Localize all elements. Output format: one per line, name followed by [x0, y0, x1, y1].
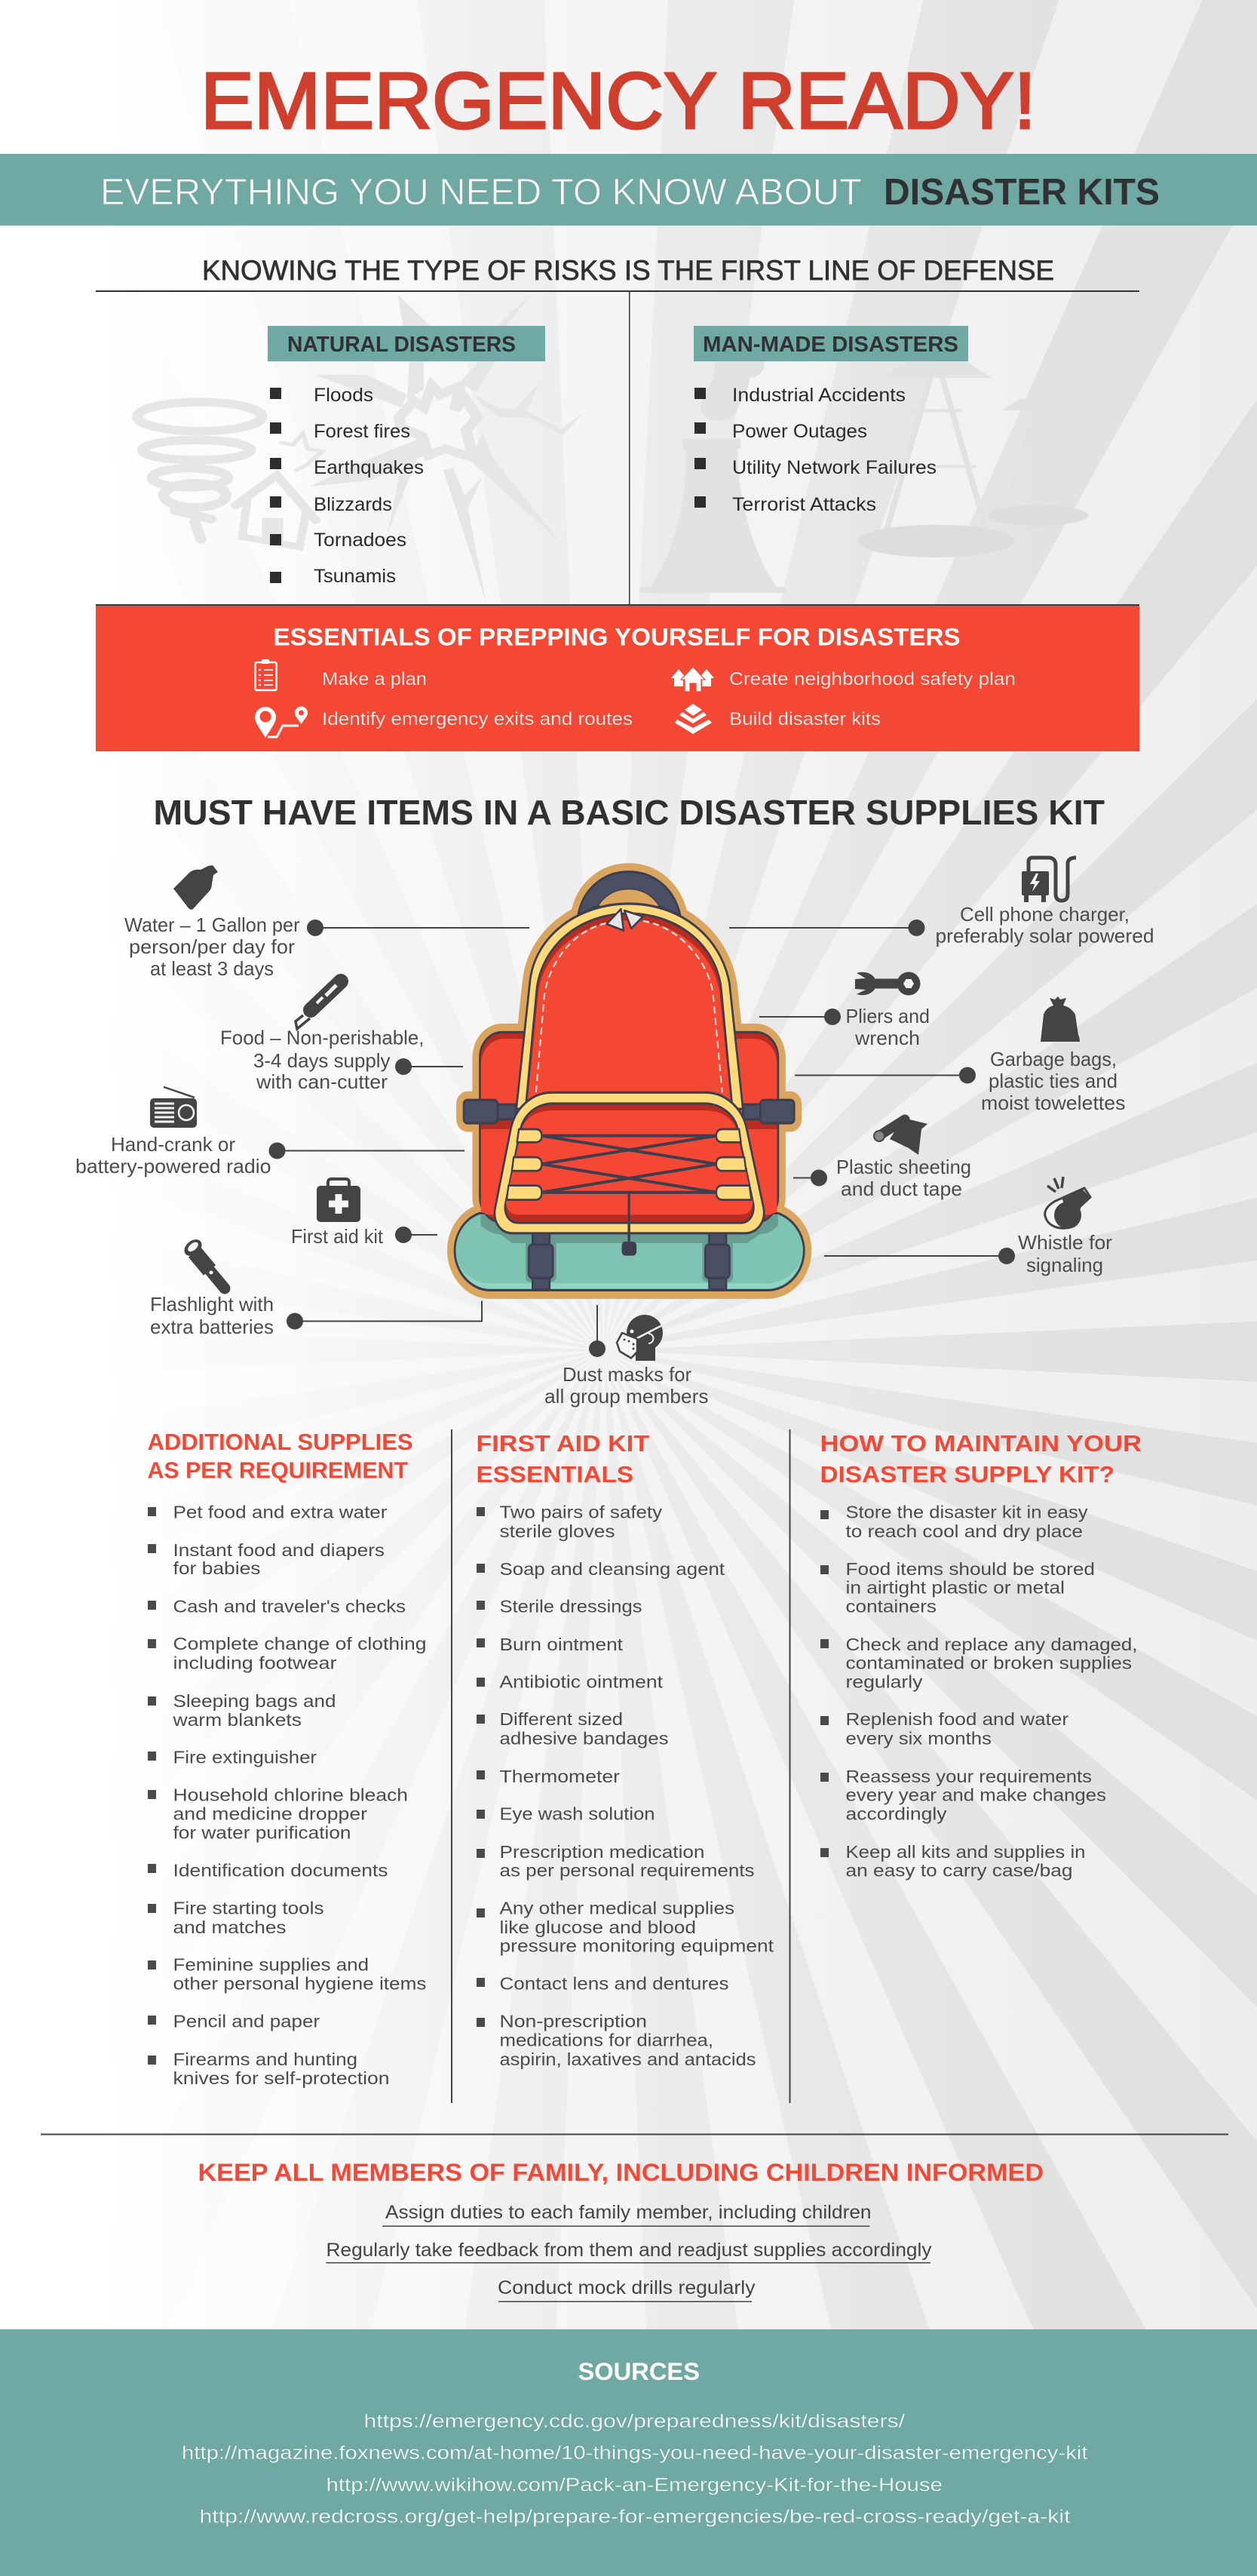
label: whistle: signaling [1026, 1254, 1103, 1276]
subtitle text: EVERYTHING YOU NEED TO KNOW ABOUT [100, 172, 862, 213]
label: charger [935, 903, 1154, 947]
panel: first aid essentials [477, 1430, 774, 2069]
ghost house [236, 434, 323, 547]
label: charger: Cell phone charger, [960, 903, 1130, 926]
source links: http://magazine.foxnews.com/at-home/10-things-you-need-have-your-disaster-emergency-kit [182, 2442, 1088, 2464]
callout: charger [729, 858, 1154, 947]
side straps [464, 1100, 794, 1123]
icon: clipboard [255, 659, 276, 690]
list: man-made disasters: Utility Network Failures [732, 457, 937, 478]
list: man-made disasters: Industrial Accidents [732, 385, 906, 406]
text: neighborhood plan: Create neighborhood safety plan [729, 669, 1016, 689]
list: first aid: sterile gloves [499, 1521, 615, 1541]
icon: charger [1022, 858, 1076, 902]
panel: keep family informed [198, 2159, 1044, 2302]
label: water: at least 3 days [150, 957, 274, 980]
connector [729, 920, 924, 936]
heading: family: KEEP ALL MEMBERS OF FAMILY, INCLUDING CHILDREN INFORMED [198, 2159, 1044, 2186]
connector [795, 1067, 976, 1083]
list: additional supplies: knives for self-protection [173, 2068, 389, 2088]
text: mock drills: Conduct mock drills regularly [498, 2277, 756, 2298]
connector [395, 1058, 463, 1075]
heading: first aid: FIRST AID KIT [477, 1430, 649, 1457]
heading: sources: SOURCES [578, 2358, 700, 2385]
ghost illustration: natural disasters [138, 294, 584, 602]
connector [268, 1142, 464, 1159]
label: flashlight [150, 1293, 274, 1338]
list: additional supplies [148, 1503, 427, 2088]
label: radio: battery-powered radio [75, 1155, 271, 1177]
label: radio [75, 1133, 271, 1177]
icon: plastic roll [874, 1118, 927, 1155]
connector [793, 1169, 827, 1186]
callout: garbage bags [795, 996, 1125, 1114]
list: additional supplies: for water purification [173, 1822, 351, 1842]
heading: additional supplies [148, 1429, 413, 1483]
label: water: person/per day for [129, 935, 295, 958]
list: first aid: pressure monitoring equipment [499, 1936, 774, 1955]
label: food: 3-4 days supply [253, 1049, 391, 1072]
label: water [124, 913, 300, 980]
list: first aid: Thermometer [499, 1767, 620, 1786]
connector [307, 920, 529, 936]
callout: flashlight [150, 1236, 482, 1338]
list: additional supplies: other personal hygiene items [173, 1973, 427, 1993]
list: additional supplies: Complete change of clothing [173, 1634, 427, 1653]
list: maintain: every six months [846, 1729, 992, 1749]
icon: wrench [855, 972, 920, 996]
label: dust masks: Dust masks for [563, 1363, 691, 1386]
connector [395, 1227, 437, 1243]
main compartment [517, 904, 743, 1109]
heading: first aid [477, 1430, 649, 1488]
text: assign duties: Assign duties to each family member, including children [385, 2202, 872, 2223]
list: maintain: containers [846, 1596, 937, 1616]
list: maintain: contaminated or broken supplies [846, 1653, 1132, 1673]
panel: essentials of prepping [96, 604, 1139, 751]
natural disasters heading: NATURAL DISASTERS [287, 333, 516, 357]
label: garbage bags: moist towelettes [981, 1091, 1125, 1114]
title: EMERGENCY READY! [201, 57, 1036, 146]
icon: layered kit [675, 704, 712, 734]
heading: maintain: DISASTER SUPPLY KIT? [820, 1461, 1114, 1488]
ghost tornado [138, 402, 262, 539]
label: dust masks [544, 1363, 709, 1408]
text: take feedback: Regularly take feedback from them and readjust supplies accordingly [326, 2240, 932, 2261]
list: additional supplies: warm blankets [172, 1710, 302, 1730]
list: first aid: Soap and cleansing agent [499, 1559, 725, 1579]
ghost cooling tower [640, 439, 786, 593]
label: flashlight: extra batteries [150, 1316, 274, 1338]
panel: sources [0, 2329, 1257, 2576]
list: maintain: regularly [846, 1672, 923, 1691]
label: whistle: Whistle for [1018, 1231, 1112, 1254]
list: natural disasters: Blizzards [314, 494, 392, 515]
callout: whistle [824, 1177, 1112, 1276]
ghost crack [309, 294, 584, 602]
list: first aid: aspirin, laxatives and antacids [499, 2049, 756, 2069]
heading: must have items: MUST HAVE ITEMS IN A BASIC DISASTER SUPPLIES KIT [154, 793, 1105, 832]
list: first aid: Burn ointment [499, 1635, 624, 1654]
list: additional supplies: Pet food and extra water [173, 1503, 388, 1522]
list: additional supplies: Instant food and diapers [173, 1540, 385, 1560]
list: maintain: Reassess your requirements [846, 1767, 1092, 1786]
list: man-made disasters [694, 385, 937, 515]
list: additional supplies: Fire extinguisher [173, 1747, 317, 1767]
source links: http://www.redcross.org/get-help/prepare-for-emergencies/be-red-cross-ready/get-a-kit [199, 2506, 1071, 2527]
list: first aid: Eye wash solution [499, 1804, 655, 1824]
label: food: Food – Non-perishable, [220, 1026, 424, 1049]
text: exits and routes: Identify emergency exits and routes [322, 709, 633, 729]
list: first aid: medications for diarrhea, [499, 2031, 713, 2050]
label: pliers: wrench [854, 1027, 920, 1049]
bottom straps [529, 1231, 729, 1290]
list: natural disasters: Earthquakes [314, 457, 424, 478]
heading: maintain: HOW TO MAINTAIN YOUR [820, 1430, 1142, 1457]
man-made disasters heading: MAN-MADE DISASTERS [703, 333, 958, 357]
list: maintain: Keep all kits and supplies in [846, 1842, 1086, 1862]
list: first aid: Prescription medication [499, 1842, 704, 1862]
list: natural disasters: Floods [314, 385, 373, 406]
front pocket [495, 1092, 764, 1256]
list: maintain: Replenish food and water [846, 1709, 1068, 1729]
list: maintain: every year and make changes [846, 1785, 1106, 1804]
list: additional supplies: Identification documents [173, 1860, 388, 1880]
label: plastic sheeting [836, 1156, 971, 1200]
label: food: with can-cutter [256, 1070, 388, 1093]
list: additional supplies: Pencil and paper [173, 2011, 320, 2031]
label: water: Water – 1 Gallon per [124, 913, 300, 936]
icon: houses [671, 667, 714, 692]
label: plastic sheeting: and duct tape [841, 1177, 962, 1200]
callout: plastic sheeting [793, 1118, 971, 1200]
list: first aid [477, 1503, 774, 2069]
ghost illustration: man-made disasters [640, 361, 1088, 593]
icon: first aid case [317, 1179, 360, 1222]
icon: whistle [1045, 1177, 1090, 1229]
list: maintain: to reach cool and dry place [846, 1521, 1083, 1541]
list: additional supplies: including footwear [173, 1653, 337, 1673]
label: pliers [846, 1005, 930, 1049]
label: first aid: First aid kit [291, 1225, 384, 1248]
list: man-made disasters: Power Outages [732, 421, 867, 442]
list: first aid: adhesive bandages [499, 1729, 668, 1749]
icon: water jug [173, 865, 218, 910]
list: first aid: Non-prescription [499, 2011, 647, 2031]
label: pliers: Pliers and [846, 1005, 930, 1027]
source links: http://www.wikihow.com/Pack-an-Emergency-Kit-for-the-House [326, 2474, 943, 2495]
list: man-made disasters: Terrorist Attacks [732, 494, 876, 515]
list: maintain: Food items should be stored [846, 1559, 1095, 1579]
ghost smoke [701, 361, 765, 421]
label: plastic sheeting: Plastic sheeting [836, 1156, 971, 1178]
callout: water [124, 865, 529, 980]
subtitle band [0, 154, 1257, 226]
source links: https://emergency.cdc.gov/preparedness/kit/disasters/ [363, 2411, 905, 2432]
list: first aid: Antibiotic ointment [499, 1672, 664, 1691]
icon: can cutter [296, 981, 341, 1029]
icon: garbage bag [1041, 996, 1080, 1042]
ghost pylon small [989, 399, 1088, 526]
label: radio: Hand-crank or [111, 1133, 235, 1156]
list: first aid: Sterile dressings [499, 1596, 642, 1616]
source links [182, 2411, 1088, 2527]
heading: risks: KNOWING THE TYPE OF RISKS IS THE FIRST LINE OF DEFENSE [202, 255, 1054, 286]
callout: pliers and wrench [759, 972, 930, 1049]
callout: first aid [291, 1179, 437, 1248]
connector [589, 1305, 606, 1357]
list: maintain: Check and replace any damaged, [846, 1635, 1137, 1654]
list: natural disasters: Forest fires [314, 421, 410, 442]
heading: maintain [820, 1430, 1142, 1488]
text: make a plan: Make a plan [322, 669, 427, 689]
panel: natural disasters [268, 326, 545, 587]
panel: additional supplies [148, 1429, 427, 2088]
list: additional supplies: Cash and traveler's checks [173, 1596, 406, 1616]
list: natural disasters: Tornadoes [314, 530, 406, 551]
icon: flashlight [181, 1236, 225, 1288]
list: additional supplies: and medicine dropper [173, 1804, 367, 1824]
label: flashlight: Flashlight with [150, 1293, 274, 1316]
heading: additional supplies: AS PER REQUIREMENT [148, 1457, 408, 1483]
callout: radio [75, 1087, 464, 1177]
list: first aid: Any other medical supplies [499, 1898, 734, 1917]
list: maintain: in airtight plastic or metal [846, 1578, 1065, 1598]
list: first aid: as per personal requirements [499, 1860, 754, 1880]
heading: additional supplies: ADDITIONAL SUPPLIES [148, 1429, 413, 1455]
subtitle emphasis: DISASTER KITS [884, 172, 1160, 213]
label: charger: preferably solar powered [935, 925, 1154, 947]
panel: how to maintain [820, 1430, 1142, 1880]
list: additional supplies: Fire starting tools [173, 1898, 324, 1917]
list: maintain: an easy to carry case/bag [846, 1860, 1072, 1880]
connector [824, 1248, 1015, 1264]
callout: food [220, 981, 463, 1093]
label: garbage bags [981, 1048, 1125, 1114]
connector [759, 1009, 841, 1025]
list: first aid: Contact lens and dentures [499, 1973, 728, 1993]
heading: first aid: ESSENTIALS [477, 1461, 633, 1488]
list: maintain: accordingly [846, 1804, 947, 1824]
list: additional supplies: for babies [173, 1558, 261, 1578]
list: maintain [820, 1503, 1137, 1880]
text: build disaster kits: Build disaster kits [729, 709, 881, 729]
bottom pad [455, 1213, 804, 1290]
ghost pylon large [857, 361, 1014, 557]
list: natural disasters [270, 385, 424, 587]
essentials heading: ESSENTIALS OF PREPPING YOURSELF FOR DISASTERS [273, 623, 961, 650]
list: first aid: like glucose and blood [499, 1917, 696, 1937]
label: dust masks: all group members [544, 1385, 709, 1408]
icon: route pins [255, 706, 308, 738]
callout: dust masks [544, 1305, 709, 1408]
label: garbage bags: plastic ties and [989, 1070, 1118, 1092]
top handle [578, 872, 680, 915]
list: additional supplies: Feminine supplies and [173, 1955, 369, 1975]
list: maintain: Store the disaster kit in easy [846, 1503, 1088, 1522]
panel: man-made disasters [694, 326, 968, 515]
icon: radio [150, 1087, 197, 1128]
connector [287, 1300, 482, 1329]
list: additional supplies: and matches [173, 1917, 287, 1937]
list: natural disasters: Tsunamis [314, 566, 396, 587]
side pockets [480, 1032, 778, 1222]
list: first aid: Different sized [499, 1709, 623, 1729]
label: food [220, 1026, 424, 1093]
list: additional supplies: Firearms and hunting [173, 2049, 357, 2069]
backpack illustration [455, 872, 804, 1290]
label: garbage bags: Garbage bags, [990, 1048, 1117, 1070]
label: whistle [1018, 1231, 1112, 1276]
icon: dust mask [617, 1315, 663, 1361]
list: additional supplies: Household chlorine bleach [173, 1785, 408, 1804]
list: additional supplies: Sleeping bags and [173, 1691, 336, 1711]
list: first aid: Two pairs of safety [499, 1503, 663, 1522]
